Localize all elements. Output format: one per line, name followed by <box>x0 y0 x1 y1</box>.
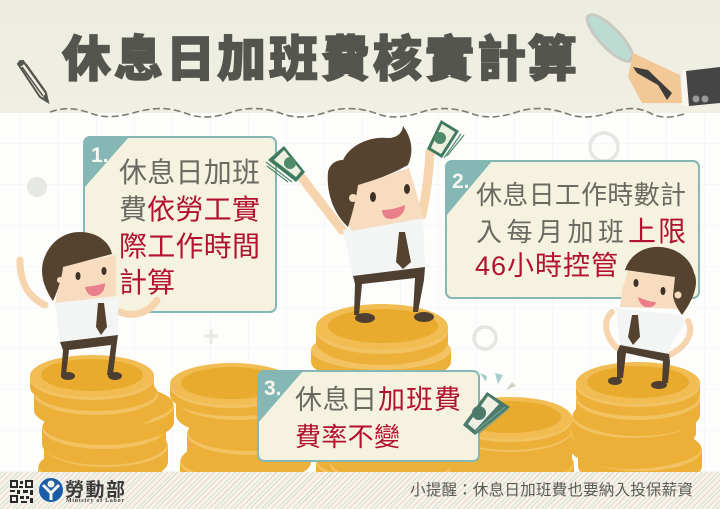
header band <box>0 0 720 113</box>
character: left man <box>20 232 157 380</box>
title: 費 <box>321 33 370 87</box>
coin stack: right of box 3 <box>448 397 574 501</box>
logo: Ministry of Labor <box>39 478 125 504</box>
logo: Ministry of Labor: 勞動部 <box>65 478 125 501</box>
title: 實 <box>425 33 474 87</box>
coin stack: left <box>30 355 174 505</box>
title: 核 <box>373 33 422 87</box>
panel 3: unchanged rate: 費率不變 <box>295 422 400 452</box>
coin stack: middle <box>170 363 311 499</box>
title: 計 <box>477 33 526 87</box>
panel 1: actual hours: 費 <box>119 194 147 225</box>
character: right man <box>606 247 696 389</box>
title <box>62 33 577 87</box>
panel 2: monthly overtime cap: 上限 <box>628 216 686 247</box>
QR code <box>10 480 33 503</box>
icon: banknote right hand <box>427 120 464 158</box>
panel 3: unchanged rate: 3. <box>264 377 282 400</box>
panel 1: actual hours <box>84 137 276 312</box>
title: 加 <box>217 33 266 87</box>
panel 3: unchanged rate: 休息日 <box>295 385 377 415</box>
title: 日 <box>166 33 215 87</box>
panel 2: monthly overtime cap: 46小時控管 <box>475 251 618 281</box>
panel 2: monthly overtime cap: 休息日工作時數計 <box>476 180 686 210</box>
panel 3: unchanged rate: 加班費 <box>378 385 461 415</box>
icon: banknote left hand <box>266 146 305 182</box>
coin stack: right <box>570 362 702 487</box>
icon: banknote with sparkles <box>463 373 516 435</box>
panel 1: actual hours: 依勞工實 <box>147 194 260 225</box>
title: 休 <box>62 33 111 87</box>
panel 1: actual hours: 休息日加班 <box>119 157 260 188</box>
panel 1: actual hours: 1. <box>91 144 109 167</box>
panel 1: actual hours: 際工作時間 <box>119 231 260 262</box>
title: 算 <box>528 33 577 87</box>
title: 班 <box>269 33 318 87</box>
wavy dashed divider <box>50 109 687 117</box>
icon: pencil <box>18 60 48 102</box>
decorative circles <box>27 133 618 349</box>
logo: Ministry of Labor: Ministry of Labor <box>66 498 124 504</box>
character: centre man <box>302 126 434 323</box>
title: 息 <box>114 33 163 87</box>
panel 2: monthly overtime cap: 2. <box>452 170 470 193</box>
coin stack: centre <box>311 304 454 501</box>
panel 3: unchanged rate <box>258 371 479 461</box>
footer band <box>0 472 720 509</box>
panel 1: actual hours: 計算 <box>119 267 175 298</box>
icon: magnifying glass in hand <box>581 9 720 106</box>
panel 2: monthly overtime cap <box>446 161 699 298</box>
reminder text: 小提醒：休息日加班費也要納入投保薪資 <box>410 481 693 499</box>
panel 2: monthly overtime cap: 入每月加班 <box>476 217 624 247</box>
